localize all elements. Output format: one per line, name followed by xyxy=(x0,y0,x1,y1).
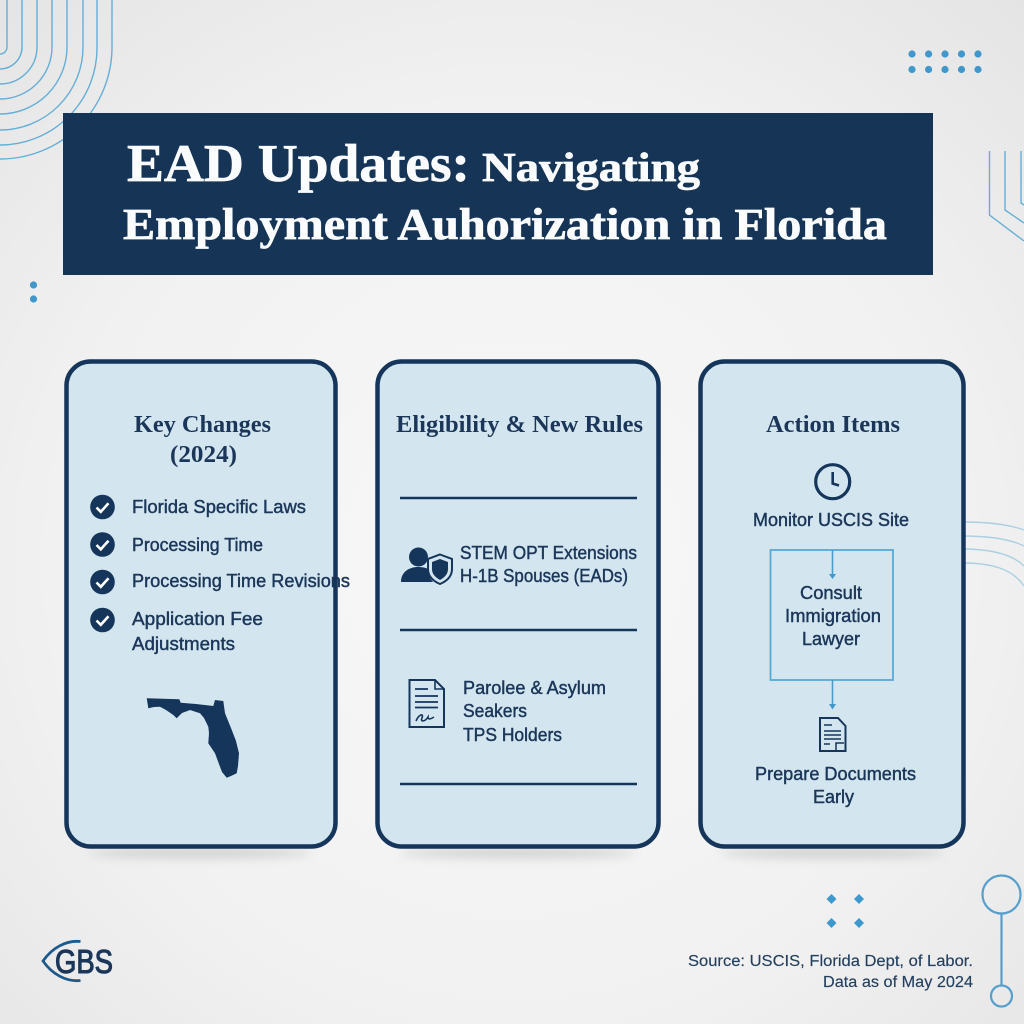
checklist item: application fee adjustments xyxy=(90,608,263,654)
decoration: dots top right xyxy=(908,50,982,73)
flow box: consult immigration lawyer: Lawyer xyxy=(802,628,860,649)
decoration: curved lines right xyxy=(962,522,1024,586)
checklist item: processing time xyxy=(90,532,263,557)
checklist item: florida specific laws xyxy=(90,495,306,519)
heading: key changes: Key Changes xyxy=(134,412,271,438)
text: prepare documents early xyxy=(755,763,916,807)
panel: action items xyxy=(700,362,964,846)
title banner xyxy=(63,113,933,275)
source note: Data as of May 2024 xyxy=(823,974,973,991)
panel: key changes xyxy=(66,362,350,846)
text: parolee, asylum, tps xyxy=(463,677,606,745)
checklist item: application fee adjustments: Adjustments xyxy=(132,633,235,654)
checklist item: application fee adjustments: Application Fee xyxy=(132,608,263,629)
text: stem opt and h-1b xyxy=(460,542,637,586)
heading: action items: Action Items xyxy=(766,412,900,438)
icon: signed document xyxy=(410,680,444,727)
decoration: diamonds xyxy=(826,894,864,928)
text: stem opt and h-1b: STEM OPT Extensions xyxy=(460,542,637,563)
card shadows xyxy=(88,848,944,858)
heading: key changes: (2024) xyxy=(170,442,237,468)
heading: key changes xyxy=(134,412,271,468)
decoration: concentric lines top left xyxy=(0,0,112,159)
text: parolee, asylum, tps: TPS Holders xyxy=(463,724,562,745)
logo: gbs: GBS xyxy=(55,943,113,980)
text: prepare documents early: Early xyxy=(813,786,855,807)
text: stem opt and h-1b: H-1B Spouses (EADs) xyxy=(460,565,628,586)
heading: eligibility and new rules: Eligibility & New Rules xyxy=(396,412,643,438)
arrow: into box xyxy=(829,550,836,579)
decoration: angled lines right xyxy=(990,151,1024,241)
text: monitor uscis site: Monitor USCIS Site xyxy=(753,509,909,530)
source note: Source: USCIS, Florida Dept, of Labor. xyxy=(688,953,973,970)
flow box: consult immigration lawyer: Immigration xyxy=(785,605,881,626)
flow box: consult immigration lawyer: Consult xyxy=(800,582,862,603)
decoration: circles and line xyxy=(982,876,1020,1006)
icon: clock xyxy=(816,465,850,499)
decoration: dots left xyxy=(30,281,37,303)
icon: person with shield xyxy=(401,548,452,584)
checklist item: processing time revisions: Processing Time Revisions xyxy=(132,570,350,591)
checklist item: florida specific laws: Florida Specific Laws xyxy=(132,496,306,517)
logo: gbs xyxy=(43,941,113,981)
icon: document xyxy=(820,718,846,751)
checklist item: processing time: Processing Time xyxy=(132,534,263,555)
icon: florida map xyxy=(147,698,239,778)
panel: eligibility and new rules xyxy=(378,362,658,846)
text: parolee, asylum, tps: Seakers xyxy=(463,700,527,721)
title line 2: Employment Auhorization in Florida xyxy=(123,200,887,249)
divider lines xyxy=(400,498,637,784)
title line 1 continued: Navigating xyxy=(482,144,701,190)
text: prepare documents early: Prepare Documents xyxy=(755,763,916,784)
source note xyxy=(688,953,973,991)
arrow: out of box xyxy=(829,680,836,710)
title line 1: EAD Updates: xyxy=(127,135,470,193)
flow box: consult immigration lawyer xyxy=(770,550,893,680)
text: parolee, asylum, tps: Parolee & Asylum xyxy=(463,677,606,698)
